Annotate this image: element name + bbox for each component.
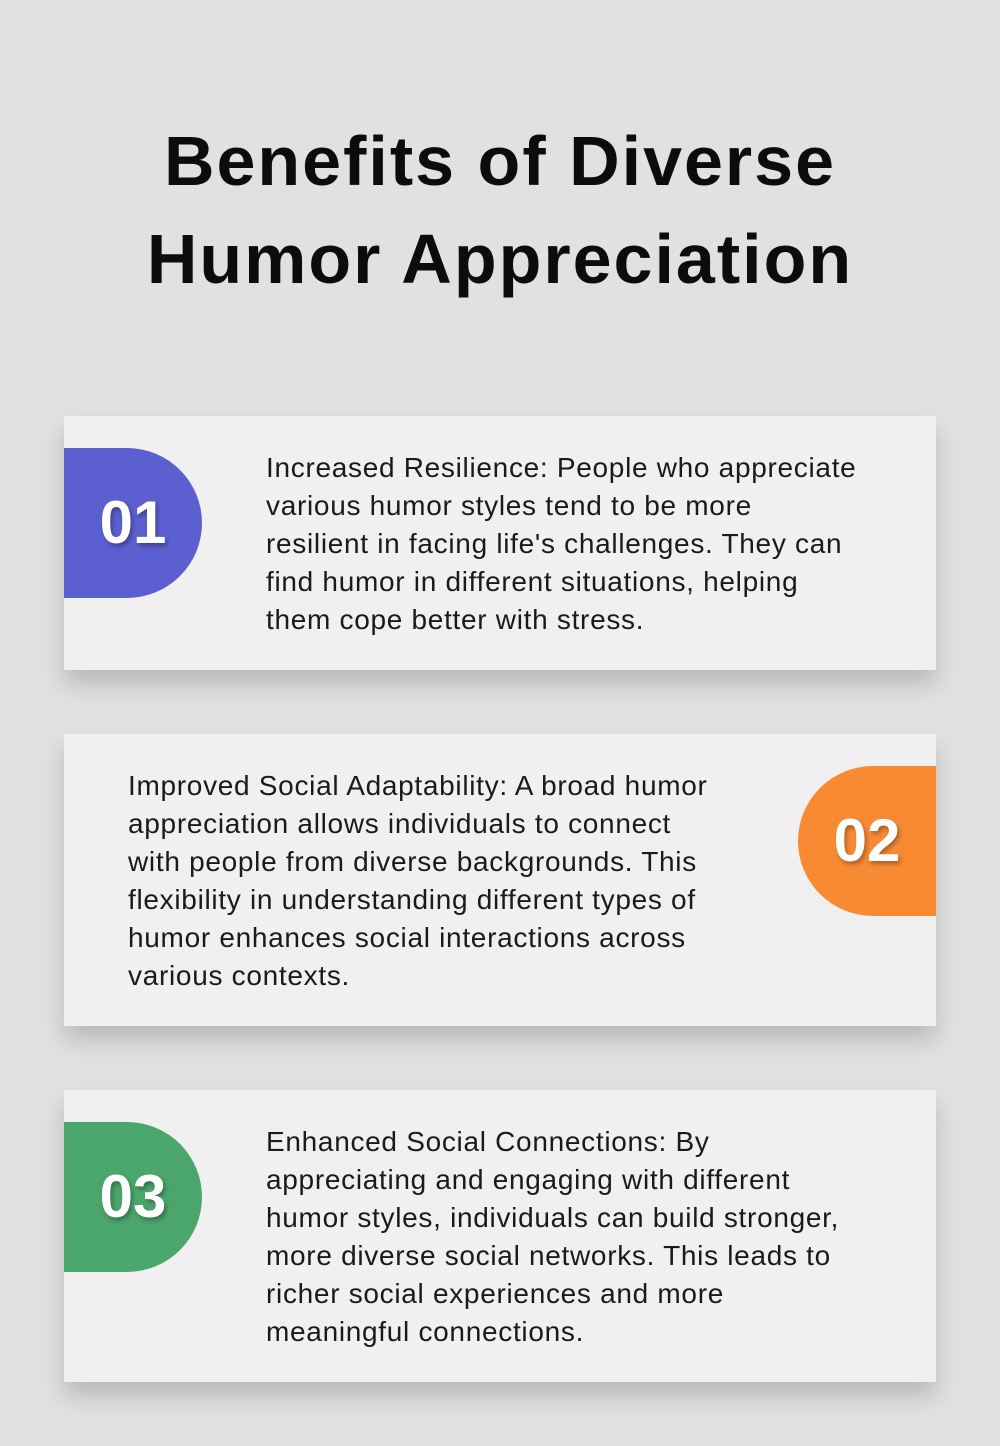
text: improved social adaptability: with people from diverse backgrounds. This — [128, 846, 697, 877]
text: enhanced social connections: Enhanced Social Connections: By — [266, 1126, 710, 1157]
text: enhanced social connections: humor styles, individuals can build stronger, — [266, 1202, 839, 1233]
badge 03 — [64, 1122, 202, 1272]
text: increased resilience — [266, 452, 856, 635]
text: increased resilience: find humor in different situations, helping — [266, 566, 798, 597]
badge 01: 01 — [100, 489, 166, 556]
badge 02 — [798, 766, 936, 916]
text: improved social adaptability: Improved Social Adaptability: A broad humor — [128, 770, 708, 801]
text: improved social adaptability: humor enhances social interactions across — [128, 922, 686, 953]
text: improved social adaptability: various contexts. — [128, 960, 350, 991]
title — [147, 122, 853, 298]
title: Humor Appreciation — [147, 220, 853, 298]
panel: card 3 — [64, 1090, 936, 1382]
text: enhanced social connections: more diverse social networks. This leads to — [266, 1240, 831, 1271]
text: improved social adaptability: flexibility in understanding different types of — [128, 884, 696, 915]
badge 01 — [64, 448, 202, 598]
text: increased resilience: resilient in facing life's challenges. They can — [266, 528, 842, 559]
text: enhanced social connections: appreciating and engaging with different — [266, 1164, 790, 1195]
text: enhanced social connections — [266, 1126, 839, 1347]
badge 02: 02 — [834, 807, 900, 874]
title: Benefits of Diverse — [164, 122, 836, 200]
text: enhanced social connections: richer social experiences and more — [266, 1278, 724, 1309]
panel: card 2 — [64, 734, 936, 1026]
text: enhanced social connections: meaningful connections. — [266, 1316, 584, 1347]
text: increased resilience: them cope better with stress. — [266, 604, 644, 635]
text: improved social adaptability: appreciation allows individuals to connect — [128, 808, 671, 839]
text: improved social adaptability — [128, 770, 708, 991]
badge 03: 03 — [100, 1163, 166, 1230]
text: increased resilience: various humor styles tend to be more — [266, 490, 752, 521]
panel: card 1 — [64, 416, 936, 670]
text: increased resilience: Increased Resilience: People who appreciate — [266, 452, 856, 483]
